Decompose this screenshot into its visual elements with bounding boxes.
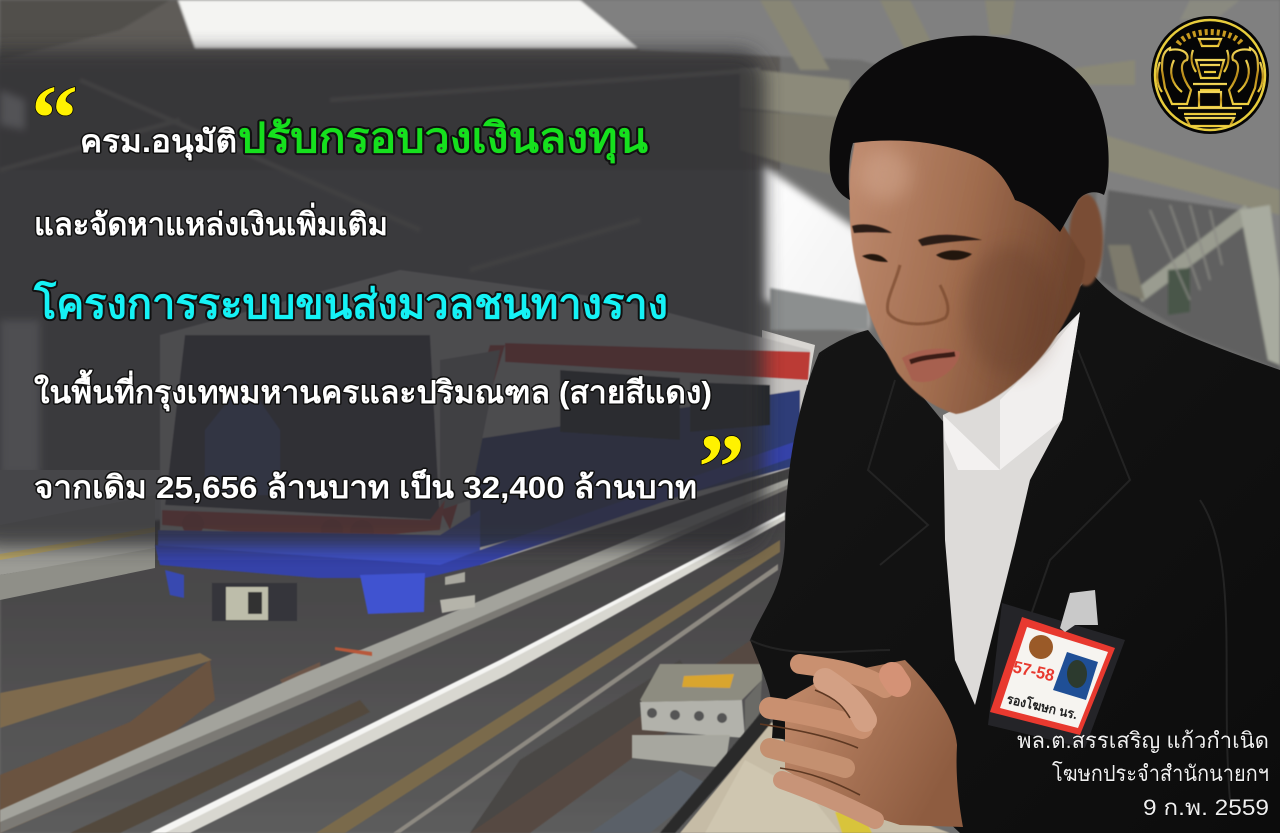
bright sky opening — [762, 165, 868, 330]
ear — [1069, 194, 1103, 286]
left platform — [0, 495, 155, 600]
train — [155, 270, 810, 656]
ID badge — [988, 590, 1125, 748]
cheek shadow — [965, 245, 1055, 375]
track equipment box — [632, 664, 762, 768]
line 2: และจัดหาแหล่งเงินเพิ่มเติม — [34, 202, 388, 242]
government seal — [1151, 16, 1269, 134]
track details — [0, 540, 780, 833]
rails — [0, 478, 790, 833]
speaker name: พล.ต.สรรเสริญ แก้วกำเนิด — [1017, 728, 1269, 753]
opening quote mark: “ — [31, 67, 78, 171]
badge clip — [1060, 590, 1098, 632]
suit jacket — [750, 273, 1280, 833]
hands — [760, 660, 963, 827]
closing quote mark: ” — [698, 416, 745, 520]
track bed — [0, 440, 800, 833]
man in dark suit — [750, 36, 1280, 833]
quote text block — [31, 67, 745, 520]
line 3: project name: โครงการระบบขนส่งมวลชนทางราง — [33, 280, 668, 327]
badge name: รองโฆษก นร. — [1005, 690, 1079, 722]
nose and mouth — [887, 265, 960, 382]
cabinet approves: ครม.อนุมัติ — [80, 124, 237, 161]
station roof — [0, 0, 1280, 370]
ceiling structure — [0, 70, 760, 270]
hair — [830, 36, 1109, 232]
forehead highlight — [859, 149, 911, 201]
headline line 1 — [80, 115, 648, 164]
left edge highlights — [0, 90, 25, 130]
white shirt — [943, 312, 1080, 705]
line 4: ในพื้นที่กรุงเทพมหานครและปริมณฑล (สายสีแดง) — [34, 369, 712, 412]
speaker caption — [1017, 728, 1269, 820]
hand back — [785, 660, 963, 827]
dark translucent text panel — [0, 50, 765, 547]
adjust investment budget: ปรับกรอบวงเงินลงทุน — [238, 115, 648, 164]
platform edge foreground — [660, 708, 950, 833]
finger gaps — [760, 690, 860, 795]
date: 9 ก.พ. 2559 — [1143, 795, 1269, 820]
line 5: budget figures: จากเดิม 25,656 ล้านบาท เป็น 32,400 ล้านบาท — [34, 468, 697, 505]
lapel shading — [750, 350, 1230, 800]
eyes and brows — [852, 224, 982, 262]
fingers — [770, 664, 898, 820]
platform roof far end — [762, 330, 815, 385]
seal emblem — [1157, 39, 1263, 126]
seal flame arc — [1178, 32, 1242, 44]
badge number: 57-58 — [1011, 657, 1056, 685]
face — [849, 135, 1085, 414]
